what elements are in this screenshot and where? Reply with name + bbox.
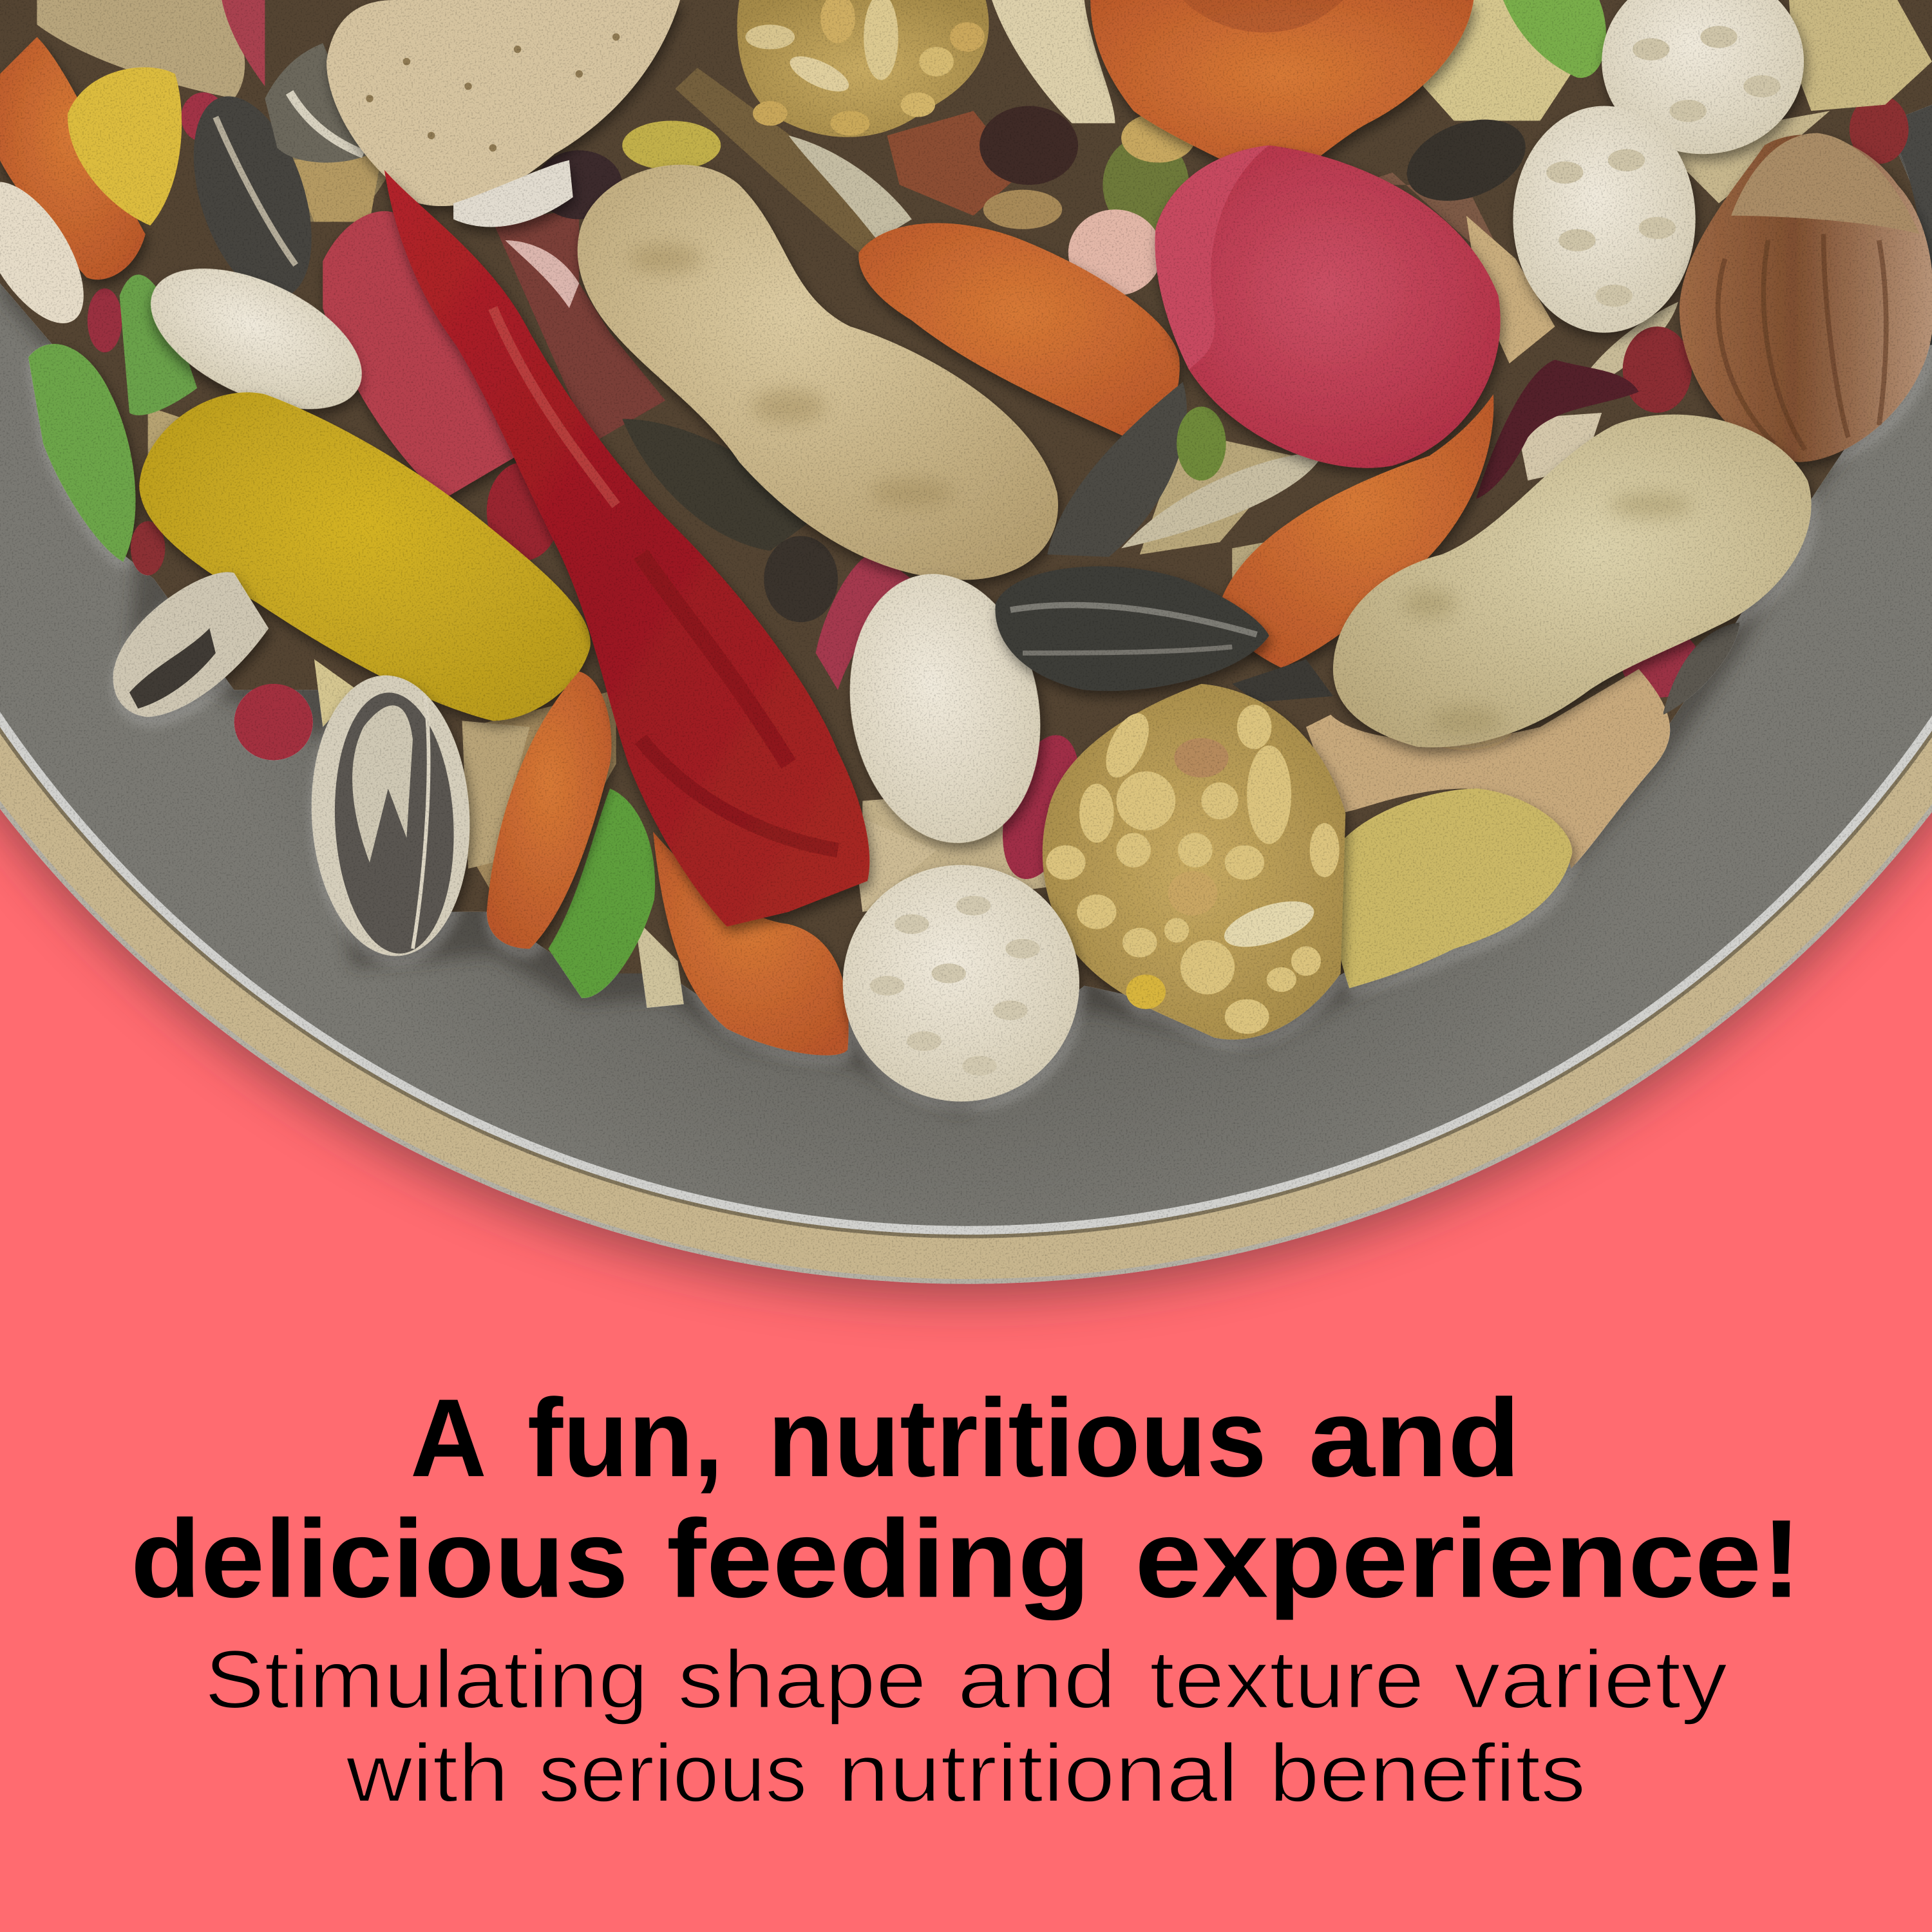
frosted pink slice xyxy=(323,211,527,499)
subheading: variety xyxy=(1454,1634,1727,1726)
subheading: shape xyxy=(677,1634,927,1726)
subheading: benefits xyxy=(1269,1727,1586,1819)
granola ball xyxy=(1043,684,1345,1039)
subheading: Stimulating xyxy=(205,1634,648,1726)
peanut centre xyxy=(578,165,1058,580)
subheading: serious xyxy=(538,1727,807,1819)
headline: A xyxy=(410,1376,487,1500)
white pumpkin seed xyxy=(129,240,383,438)
black sunflower seeds top left xyxy=(171,43,370,313)
green piece top right xyxy=(1503,0,1606,78)
headline: fun, xyxy=(527,1376,723,1500)
headline: feeding xyxy=(667,1497,1090,1621)
orange stick xyxy=(858,223,1180,444)
headline: nutritious xyxy=(768,1376,1267,1500)
subheading: and xyxy=(958,1634,1116,1726)
subheading: nutritional xyxy=(838,1727,1238,1819)
striped seed centre right xyxy=(1047,382,1325,557)
striped seed behind stick xyxy=(788,135,912,240)
hazelnut xyxy=(1680,133,1932,462)
banana chip xyxy=(1329,788,1572,988)
thin seed behind peanut right xyxy=(1663,622,1740,715)
orange piece bottom left xyxy=(487,672,612,949)
dark raisin and pink pellets centre xyxy=(131,462,1700,887)
dried stick xyxy=(675,68,905,261)
dark sunflower seed centre xyxy=(995,566,1269,691)
dark backing mass xyxy=(0,0,1932,1084)
tan chunks top right xyxy=(1423,0,1932,480)
white chunk top centre xyxy=(992,0,1115,123)
green pieces left xyxy=(28,274,197,562)
corn kernel xyxy=(68,68,182,225)
headline: experience! xyxy=(1135,1497,1801,1621)
shadow of food on bowl xyxy=(0,0,1932,1115)
left orange piece xyxy=(0,37,146,279)
peanut right xyxy=(1333,415,1812,747)
reddish brown bits top centre xyxy=(88,92,1909,413)
almond right xyxy=(1306,669,1670,869)
red round disc xyxy=(1155,146,1501,468)
orange crescent right xyxy=(1220,394,1493,668)
headline: delicious xyxy=(131,1497,629,1621)
sunflower seed bottom left xyxy=(305,671,477,960)
dark seed under peanut xyxy=(622,419,816,551)
tan chunks top left xyxy=(37,0,382,222)
dark bowl corner right xyxy=(1885,105,1932,345)
tan chunks centre xyxy=(314,659,936,1008)
white rice ball xyxy=(843,865,1079,1101)
green piece bottom xyxy=(548,788,655,998)
white balls top right xyxy=(1513,0,1804,333)
dark seed tail xyxy=(1232,659,1333,703)
filler pieces between large items xyxy=(148,74,1678,936)
orange piece bottom xyxy=(653,831,849,1056)
pale seed left edge xyxy=(0,165,104,340)
red chili pepper xyxy=(384,170,869,927)
large almond top xyxy=(327,0,680,227)
white pistachio xyxy=(829,559,1061,858)
subheading: with xyxy=(346,1727,509,1819)
yellow stick xyxy=(139,392,591,721)
subheading: texture xyxy=(1150,1634,1425,1726)
carrot slice xyxy=(1090,0,1473,185)
bowl shadow xyxy=(0,0,1932,1296)
striped seed left xyxy=(113,572,269,717)
ceramic bowl xyxy=(0,0,1932,1284)
small dark seed xyxy=(1396,104,1537,216)
top granola cluster xyxy=(737,0,989,137)
headline xyxy=(131,1376,1801,1621)
food pile xyxy=(0,0,1932,1101)
subheading xyxy=(205,1634,1727,1819)
dark hibiscus flake xyxy=(1476,360,1639,499)
headline: and xyxy=(1309,1376,1520,1500)
